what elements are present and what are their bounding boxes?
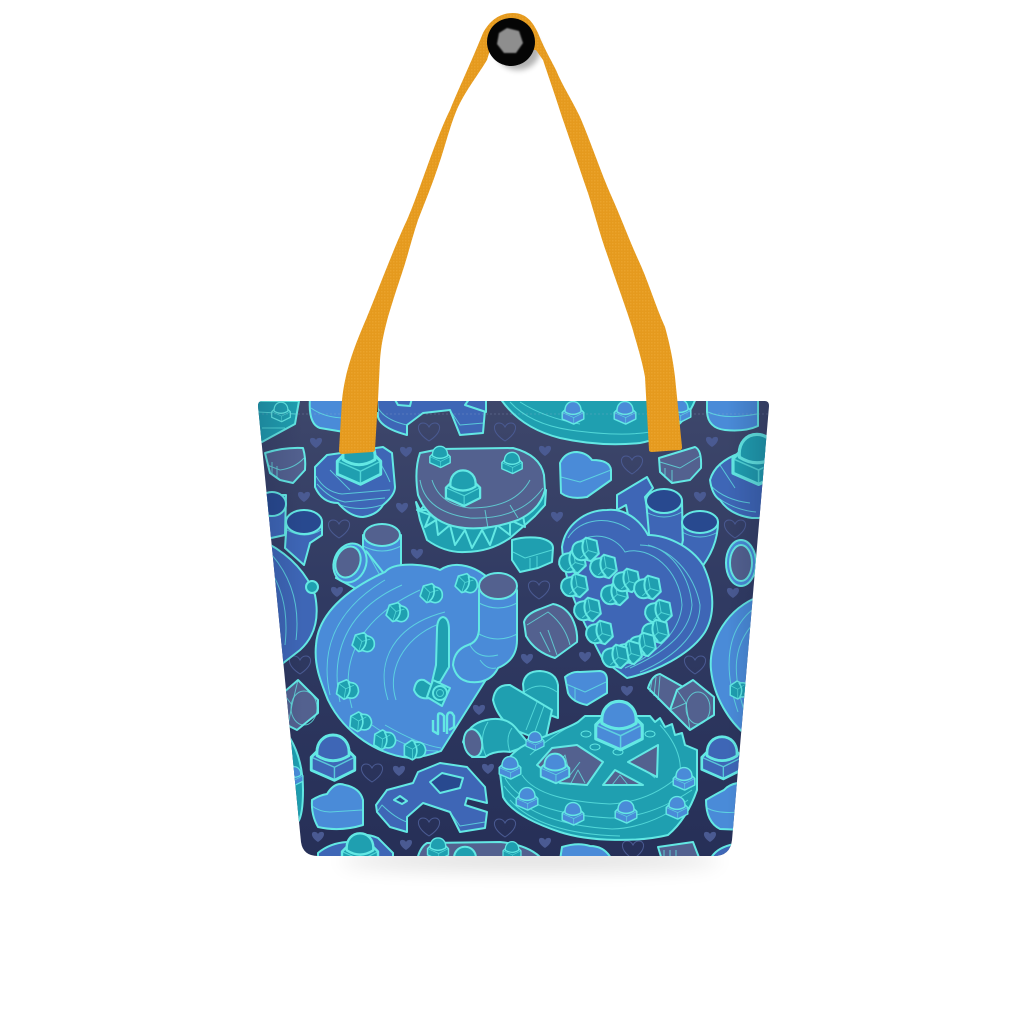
right oval pipe end — [726, 540, 756, 586]
bolts around rim — [336, 571, 480, 760]
teal small heart — [512, 537, 553, 572]
product illustration — [258, 13, 769, 876]
elbow pipe — [453, 573, 517, 682]
slate bolt — [648, 674, 714, 730]
body rings — [327, 580, 445, 751]
central light-blue heart machine — [316, 524, 517, 760]
bottom slate heart fragment — [417, 838, 543, 878]
wrench fragment top — [377, 398, 486, 435]
heart body — [316, 565, 500, 758]
slate small heart centre — [524, 604, 577, 658]
left strap back edge shadow — [372, 400, 378, 412]
blue heart machine with bolts — [557, 477, 718, 678]
blue dome nut right — [702, 737, 742, 779]
left pipes and body fragment — [266, 491, 323, 664]
fabric shading — [250, 395, 780, 865]
bottom stacked heart fragment — [318, 833, 393, 871]
light heart top-right fragment — [707, 398, 758, 430]
teal edge fragment left — [280, 738, 303, 832]
fabric background — [250, 395, 780, 865]
angled and upright pipes — [332, 523, 402, 588]
ground shadow — [340, 851, 720, 869]
heart body — [562, 510, 712, 678]
blue bolts — [499, 701, 695, 825]
light heart — [560, 452, 611, 498]
rear pipes — [617, 477, 718, 572]
panel: bag body with pattern — [250, 395, 781, 878]
vent holes — [581, 731, 655, 755]
top-left teal piece — [258, 401, 300, 443]
small outlined hearts — [289, 423, 746, 859]
right stacked heart with teal nut — [709, 432, 766, 519]
light heart top fragment — [308, 401, 342, 432]
big teal heart fragment top — [500, 398, 696, 444]
slate heart small left — [265, 448, 305, 483]
bottom light heart fragment — [560, 844, 612, 860]
light heart centre bottom — [565, 671, 607, 705]
light heart lower left — [312, 784, 363, 829]
peg — [487, 18, 535, 66]
orange strap handle — [339, 13, 682, 454]
small filled hearts — [298, 437, 739, 850]
slate hex nut left — [283, 680, 318, 730]
gear windows — [537, 745, 658, 785]
light heart lower right — [706, 782, 745, 830]
logo mark — [433, 712, 454, 734]
stitch line — [258, 413, 769, 415]
teal bolts in heart shape — [557, 536, 673, 671]
peg hex bolt — [497, 28, 523, 53]
body rings — [568, 521, 700, 672]
stacked heart with teal nut — [315, 439, 395, 517]
right big blue fragment — [710, 598, 753, 732]
bottom slate fragment — [658, 842, 700, 860]
heart body — [500, 716, 697, 840]
blue wrench — [376, 763, 487, 832]
body rings — [504, 722, 692, 836]
pipes — [462, 671, 558, 758]
slate heart with gear — [416, 446, 546, 552]
peg black cap — [487, 18, 535, 66]
bottom blue fragment — [710, 844, 734, 860]
blue dome nut left — [311, 735, 355, 780]
slate heart under strap — [659, 447, 701, 483]
lever handle — [414, 617, 450, 706]
teal heart machine with window — [462, 671, 697, 840]
rear peg shadow — [496, 30, 540, 70]
